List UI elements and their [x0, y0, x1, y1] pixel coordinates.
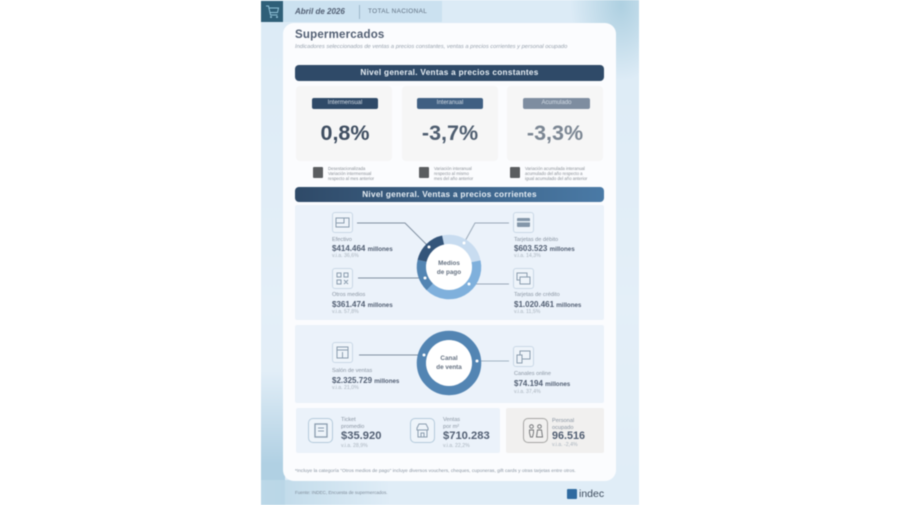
subtitle: Indicadores seleccionados de ventas a precios constantes, ventas a precios corrientes y personal ocupado: [295, 44, 567, 50]
label: interanual: [417, 98, 483, 109]
text: v.i.a. 21,0%: [332, 385, 359, 391]
item: tarjetas de debito: Tarjetas de débito: [514, 237, 558, 243]
text: $361.474 millones: [332, 300, 393, 309]
card: intermensual: [296, 86, 392, 161]
item: ticket promedio: [340, 416, 365, 430]
section heading: current prices: Nivel general. Ventas a precios corrientes: [362, 190, 537, 199]
icon: debito: [513, 212, 534, 233]
donut label: de pago: [437, 269, 461, 276]
item: otros medios: Otros medios: [332, 292, 365, 298]
item: ticket promedio: promedio: [341, 424, 364, 430]
icon: otros medios: [332, 268, 353, 289]
icon: salon de ventas: [332, 342, 353, 363]
card: acumulado: [507, 86, 603, 161]
icon: efectivo: [332, 212, 353, 233]
icon: ventas por m2: [410, 418, 435, 443]
value: acumulado: -3,3%: [527, 121, 583, 145]
text: $74.194 millones: [514, 379, 570, 388]
logo: indec: [566, 488, 604, 500]
note text 3: igual acumulado del año anterior: [525, 176, 587, 181]
text: v.i.a. -2,4%: [552, 442, 578, 448]
item: tarjetas de credito: Tarjetas de crédito: [514, 292, 560, 298]
donut chart: medios de pago: [356, 222, 510, 300]
donut chart: canal de venta: [358, 330, 510, 396]
text: v.i.a. 14,3%: [514, 253, 541, 259]
logo: indec: indec: [579, 488, 604, 500]
note text 2: mes del año anterior: [434, 176, 473, 181]
donut label: [436, 354, 462, 371]
panel: medios de pago: [295, 205, 604, 320]
title: Supermercados: [295, 29, 385, 41]
donut label: Canal: [440, 355, 458, 362]
text: v.i.a. 22,2%: [443, 443, 470, 449]
value: intermensual: 0,8%: [320, 121, 370, 145]
main white card: [283, 23, 616, 481]
panel: canal de venta: [295, 325, 604, 403]
note icon 3: [510, 167, 520, 178]
item: canales online: Canales online: [514, 371, 551, 377]
text: v.i.a. 36,6%: [332, 253, 359, 259]
panel: personal ocupado: [506, 408, 604, 453]
page background: [261, 0, 639, 505]
note icon 2: [419, 167, 429, 178]
section heading: constant prices: [295, 65, 604, 81]
item: personal ocupado: Personal: [552, 418, 574, 424]
icon: canales online: [513, 346, 534, 367]
panel: ticket and sales per m2: [296, 408, 500, 453]
header tab: date and coverage: [283, 1, 442, 22]
item: personal ocupado: ocupado: [552, 425, 573, 431]
note text 1: respecto al mes anterior: [328, 176, 374, 181]
header tab: date and coverage: TOTAL NACIONAL: [368, 8, 427, 15]
text: $414.464 millones: [332, 244, 393, 253]
note icon 1: [313, 167, 323, 178]
text: $2.325.729 millones: [332, 376, 399, 385]
note text 3: acumulado del año respecto a: [525, 171, 583, 176]
label: intermensual: [312, 98, 378, 109]
header: cart icon: [261, 1, 283, 22]
item: salon de ventas: Salón de ventas: [332, 368, 372, 374]
note text 3: [524, 166, 588, 182]
section heading: current prices: [295, 187, 604, 202]
source: Fuente: INDEC, Encuesta de supermercados.: [295, 490, 388, 495]
item: ventas por m2: [442, 416, 460, 430]
note text 2: [434, 166, 474, 181]
section heading: constant prices: Nivel general. Ventas a precios constantes: [360, 68, 539, 77]
value: interanual: -3,7%: [422, 121, 478, 145]
icon: ticket: [308, 418, 333, 443]
label: interanual: Interanual: [437, 100, 463, 106]
header tab: date and coverage: Abril de 2026: [295, 7, 345, 16]
text: $1.020.461 millones: [514, 300, 581, 309]
text: v.i.a. 28,9%: [341, 443, 368, 449]
note text 2: respecto al mismo: [434, 171, 469, 176]
text: v.i.a. 11,5%: [514, 309, 540, 315]
text: $35.920: [341, 430, 381, 442]
text: 96.516: [552, 430, 585, 442]
icon: credito: [513, 268, 534, 289]
footnote: *Incluye la categoría "Otros medios de pago" incluye diversos vouchers, cheques, cuponeras, gift cards y otras tarjetas entre otros.: [295, 469, 576, 474]
item: efectivo: Efectivo: [332, 237, 352, 243]
card: interanual: [402, 86, 498, 161]
note text 1: [328, 166, 374, 182]
item: ticket promedio: Ticket: [341, 417, 356, 423]
text: $710.283: [443, 430, 490, 442]
donut label: Medios: [438, 260, 460, 267]
label: acumulado: Acumulado: [541, 100, 572, 106]
text: v.i.a. 37,4%: [514, 389, 541, 395]
text: v.i.a. 57,8%: [332, 309, 359, 315]
label: intermensual: Intermensual: [328, 100, 362, 106]
note text 1: Variación intermensual: [328, 171, 371, 176]
label: acumulado: [523, 98, 590, 109]
note text 1: Desestacionalizada: [328, 166, 365, 171]
item: ventas por m2: por m²: [443, 424, 459, 430]
note text 3: Variación acumulada interanual: [525, 166, 585, 171]
item: personal ocupado: [552, 418, 574, 431]
icon: personal: [523, 418, 548, 443]
text: $603.523 millones: [514, 244, 575, 253]
note text 2: Variación interanual: [434, 166, 472, 171]
donut label: [436, 260, 462, 276]
item: ventas por m2: Ventas: [443, 417, 460, 423]
donut label: de venta: [436, 364, 462, 371]
